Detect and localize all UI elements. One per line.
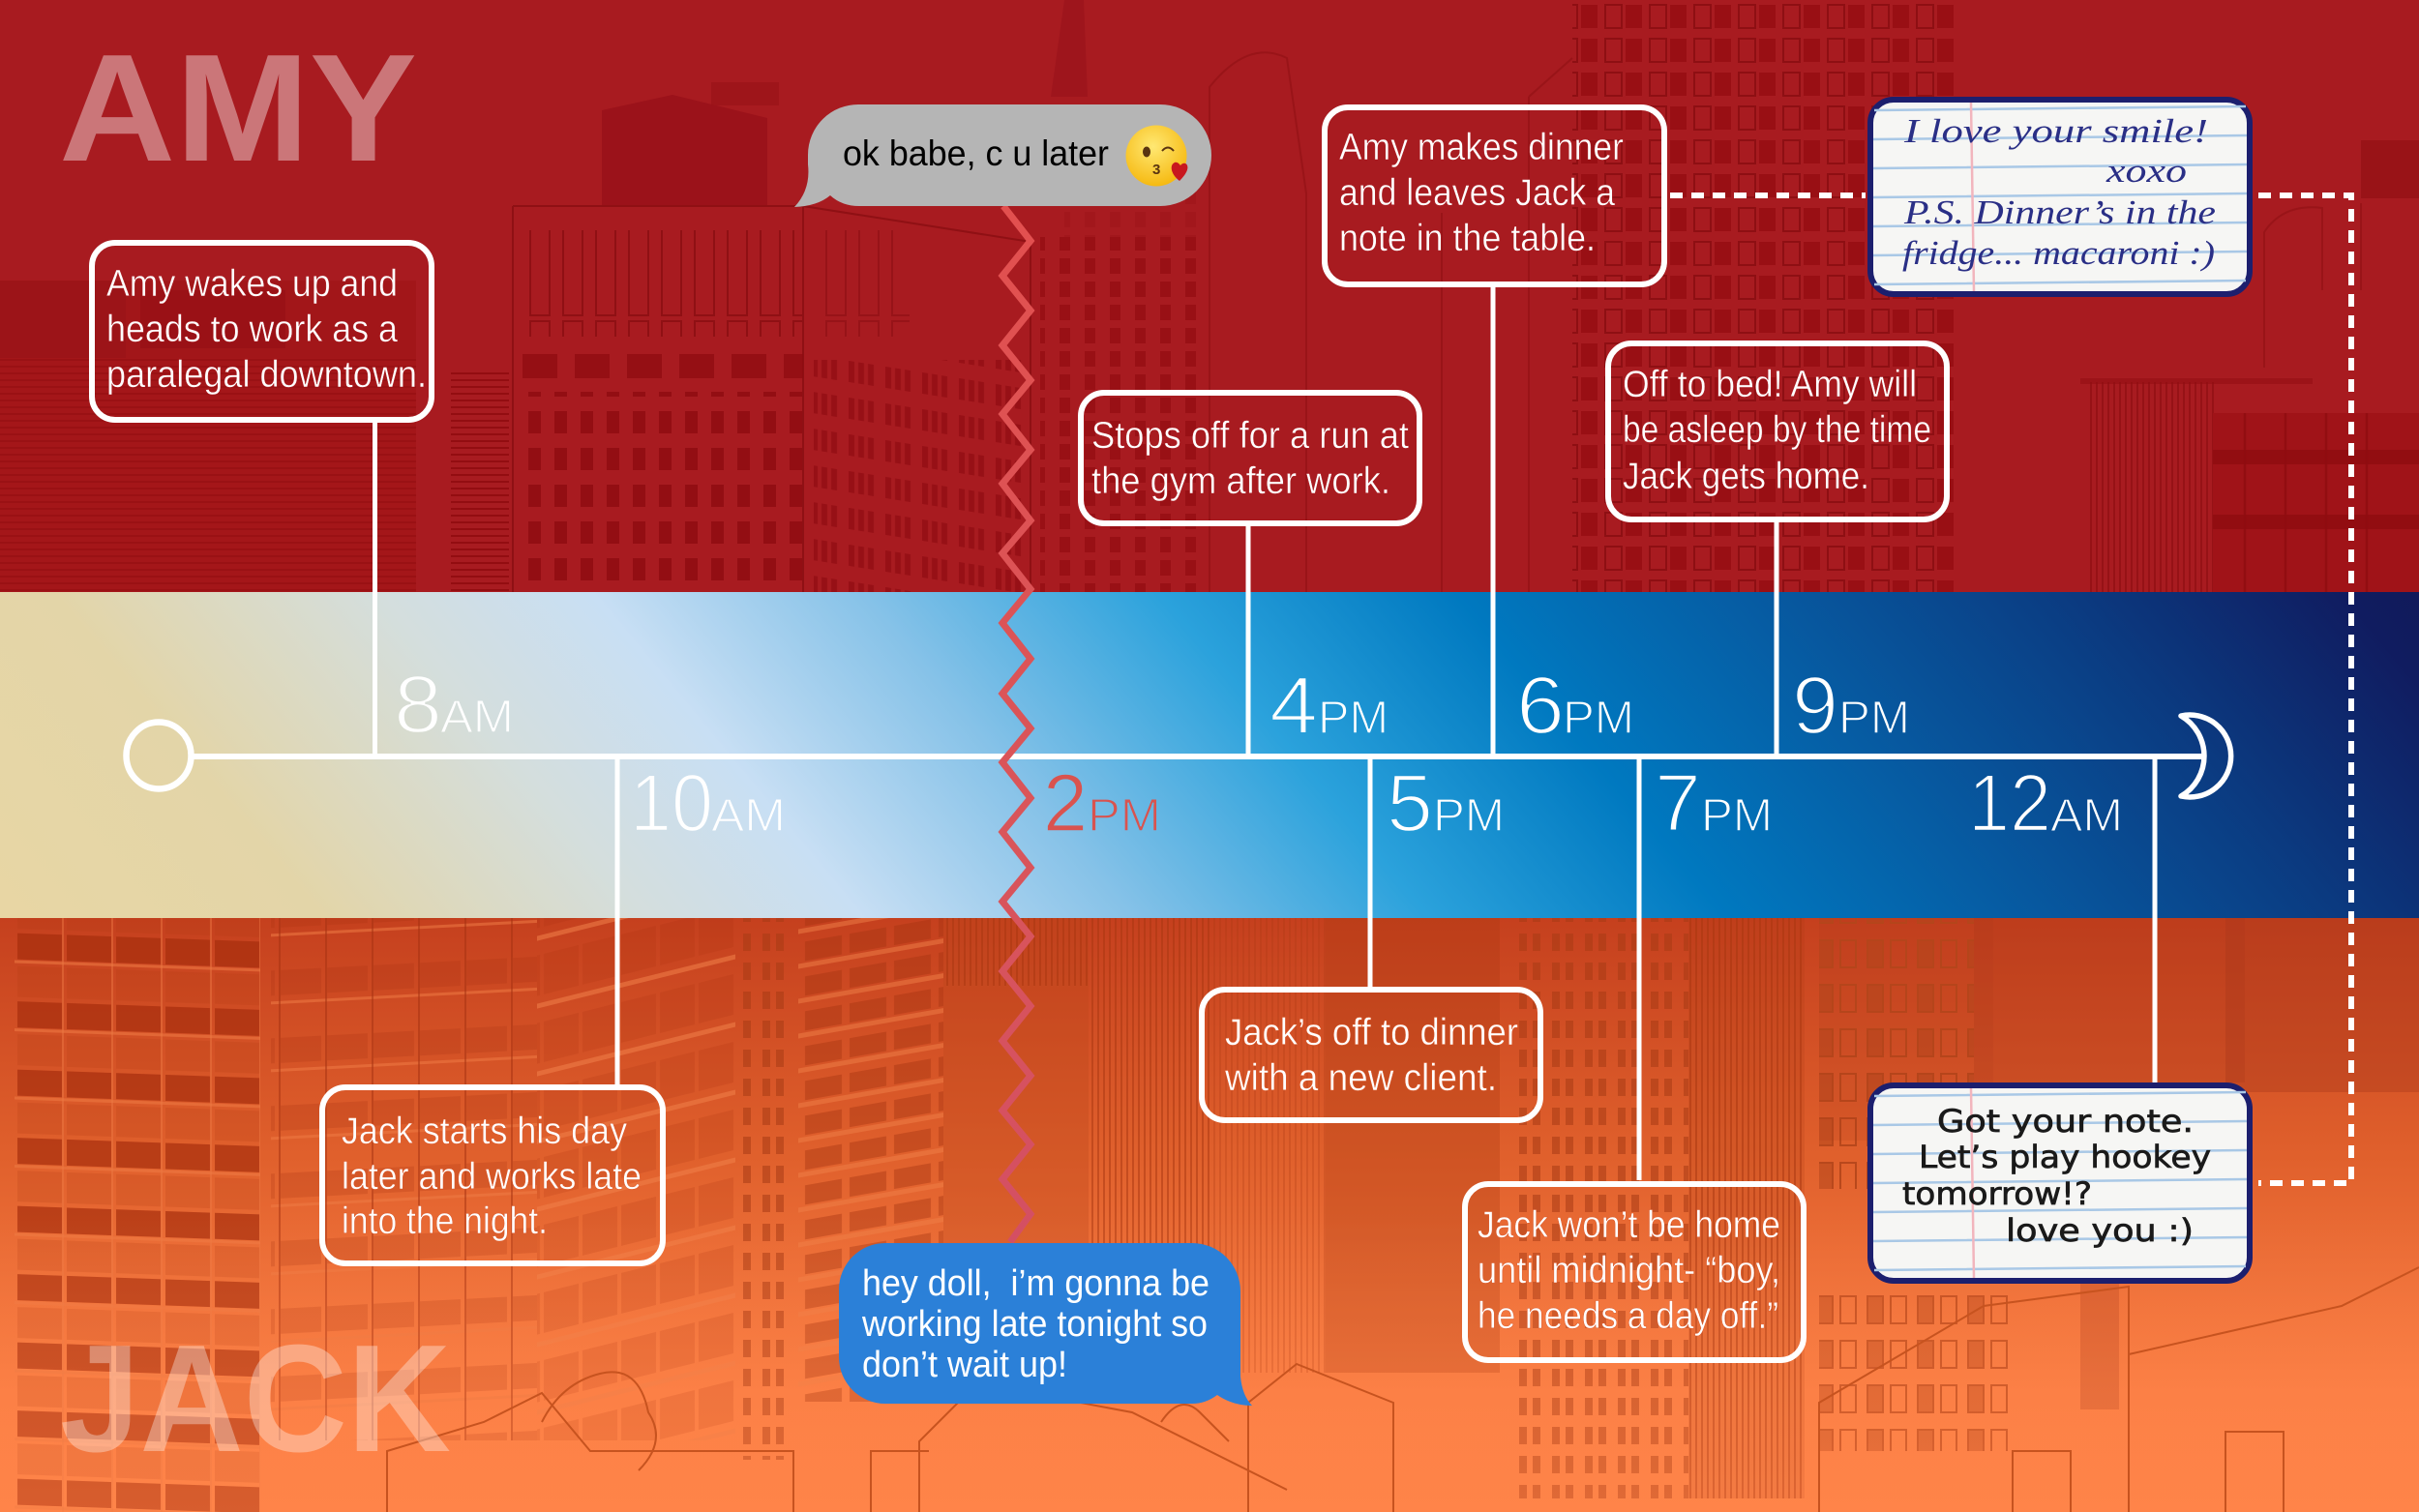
callout: Jack starts his day: into the night. (342, 1201, 548, 1242)
callout: off to bed: be asleep by the time (1623, 409, 1931, 451)
callout: Amy makes dinner (1325, 107, 1664, 284)
heading: AMY: AMY (59, 23, 417, 193)
callout: Jack starts his day: later and works late (342, 1156, 642, 1198)
time label: 5PM: 5 (1387, 757, 1433, 848)
bubble: Amy's text message (794, 104, 1211, 207)
time label: 6PM: PM (1563, 693, 1634, 744)
time label: 8AM (394, 659, 514, 750)
note: Amy's handwritten note: P.S. Dinner’s in the (1903, 193, 2216, 231)
time label: 12AM: 12 (1968, 757, 2051, 848)
time label: 2PM: 2 (1043, 757, 1088, 848)
icon: sun start circle (126, 722, 192, 789)
time label: 9PM (1792, 660, 1910, 751)
note: Jack's handwritten reply: Let’s play hookey (1919, 1139, 2211, 1175)
bubble: Jack's text message (839, 1243, 1252, 1406)
callout: Amy wakes up: Amy wakes up and (106, 263, 398, 305)
icon: kissing emoji: 3 (1152, 162, 1160, 178)
callout: Jack won't be home (1465, 1184, 1804, 1360)
time label: 12AM (1968, 757, 2123, 848)
callout: Amy makes dinner: Amy makes dinner (1339, 127, 1624, 168)
time label: 7PM: PM (1701, 790, 1773, 842)
time label: 4PM: PM (1318, 693, 1389, 744)
band: sky gradient day to night (0, 592, 2419, 918)
callout: Jack off to dinner (1202, 990, 1540, 1120)
zigzag: 2PM text exchange connector (1002, 206, 1030, 1242)
note: Amy's handwritten note: I love your smile! (1903, 112, 2208, 150)
callout: Amy wakes up (92, 243, 432, 420)
note: Jack's handwritten reply: love you :) (2006, 1212, 2194, 1249)
time label: 5PM: PM (1433, 790, 1505, 842)
time label: 8AM: AM (440, 692, 514, 743)
time label: 10AM (630, 757, 786, 848)
callout: gym after work: the gym after work. (1091, 460, 1390, 502)
timeline: vertical stems (375, 287, 2155, 1180)
callout: off to bed: Jack gets home. (1623, 456, 1869, 497)
note: Jack's handwritten reply: Got your note. (1937, 1103, 2194, 1140)
time label: 8AM: 8 (394, 659, 442, 750)
bubble: Jack's text message: hey doll, i’m gonna be (862, 1263, 1210, 1304)
note: Amy's handwritten note: fridge... macaroni :) (1902, 234, 2215, 272)
bubble: Jack's text message: working late tonight so (861, 1304, 1208, 1345)
icon: kissing emoji (1126, 126, 1187, 186)
callout: off to bed (1608, 343, 1947, 519)
icon: crescent moon (2181, 715, 2231, 797)
note: Amy's handwritten note (1870, 100, 2250, 294)
callout: Jack off to dinner: with a new client. (1224, 1057, 1497, 1099)
callout: Jack off to dinner: Jack’s off to dinner (1225, 1012, 1518, 1053)
time label: 4PM: 4 (1269, 660, 1318, 751)
callout: Jack won't be home: he needs a day off.” (1478, 1295, 1778, 1337)
callout: Amy wakes up: heads to work as a (106, 309, 398, 350)
callout: gym after work (1081, 393, 1419, 523)
time label: 12AM: AM (2050, 790, 2123, 842)
time label: 2PM: PM (1088, 790, 1161, 842)
callout: Amy makes dinner: note in the table. (1339, 218, 1596, 259)
callout: Jack won't be home: Jack won’t be home (1478, 1204, 1780, 1246)
bubble: Amy's text message: ok babe, c u later (843, 133, 1109, 173)
callout: Amy wakes up: paralegal downtown. (106, 354, 427, 396)
callout: Jack starts his day: Jack starts his day (342, 1111, 627, 1152)
time label: 5PM (1387, 757, 1505, 848)
note: Amy's handwritten note: xoxo (2105, 152, 2187, 190)
time label: 4PM (1269, 660, 1389, 751)
background: Jack orange city skyline (0, 918, 2419, 1512)
note: Jack's handwritten reply: tomorrow!? (1902, 1175, 2092, 1212)
time label: 6PM: 6 (1516, 660, 1565, 751)
timeline: main axis (194, 754, 2204, 759)
callout: Jack starts his day (322, 1087, 663, 1263)
time label: 10AM: 10 (630, 757, 713, 848)
bubble: Jack's text message: don’t wait up! (862, 1345, 1067, 1385)
callout: Jack won't be home: until midnight- “boy, (1478, 1250, 1780, 1291)
heading: JACK: JACK (60, 1314, 451, 1484)
time label: 6PM (1516, 660, 1634, 751)
background: Amy red city skyline (0, 0, 2419, 592)
note: Jack's handwritten reply (1870, 1085, 2250, 1281)
callout: off to bed: Off to bed! Amy will (1623, 364, 1917, 405)
time label: 10AM: AM (711, 790, 786, 842)
time label: 7PM: 7 (1655, 757, 1701, 848)
time label: 9PM: PM (1838, 693, 1910, 744)
callout: gym after work: Stops off for a run at (1091, 415, 1409, 457)
callout: Amy makes dinner: and leaves Jack a (1339, 172, 1615, 214)
time label: 7PM (1655, 757, 1773, 848)
time label: 2PM (1043, 757, 1161, 848)
connector: dashed link between the notes (1670, 195, 2351, 1183)
time label: 9PM: 9 (1792, 660, 1838, 751)
